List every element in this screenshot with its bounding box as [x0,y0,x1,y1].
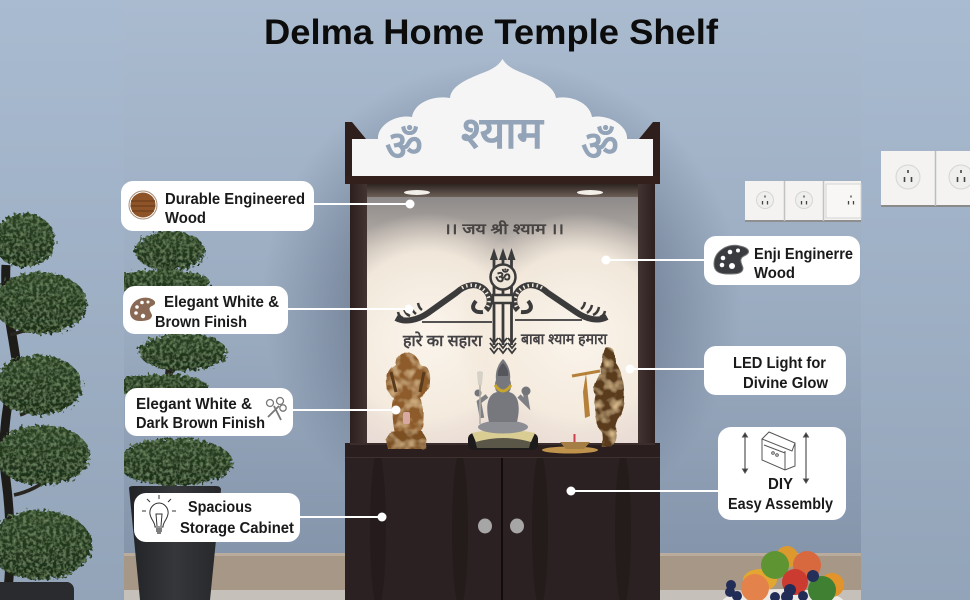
callout: enji engineered wood: Enjı Enginerre [754,246,853,263]
callout: DIY easy assembly: DIY [768,476,793,493]
ceiling [367,184,638,197]
LED light right [577,190,603,195]
callout: enji engineered wood [704,236,860,285]
icon: brown palette [130,298,155,321]
left column [350,184,367,446]
crown side posts [345,122,660,180]
callout: LED light for divine glow: Divine Glow [743,375,829,392]
callout: elegant white and dark brown finish: Dark Brown Finish [136,415,265,432]
statue plate and lamp [542,434,598,454]
leader lines and dots [288,200,718,522]
right emblem text: बाबा श्याम हमारा [520,331,608,348]
back panel with light glow [367,197,638,445]
crown om right: ॐ [581,123,619,169]
icon: wood disc [129,191,157,219]
callout: spacious storage cabinet: Spacious [188,499,252,516]
callout: elegant white and dark brown finish: Elegant White & [136,396,252,413]
bow and arrows emblem [396,248,607,353]
callout: elegant white and brown finish: Brown Finish [155,314,247,331]
left bonsai tree [0,213,92,590]
floor and skirting [124,553,861,600]
crown white arch panel [352,59,653,176]
door handle right [510,518,524,534]
crown om left: ॐ [385,123,423,169]
callout: durable engineered wood [121,181,314,231]
top wall text: ।। जय श्री श्याम ।। [444,220,564,238]
callout: spacious storage cabinet: Storage Cabinet [180,520,295,537]
icon: light bulb [142,495,176,533]
crown beam [345,176,660,184]
callout: durable engineered wood: Wood [165,210,206,227]
callout: elegant white and brown finish [123,286,288,334]
title: Delma Home Temple Shelf [264,13,718,52]
shelf top [345,443,660,458]
cabinet doors [345,452,660,600]
icon: scissors [266,398,286,420]
door handle left [478,518,492,534]
left emblem text: हारे का सहारा [402,331,483,350]
fruit bowl [722,546,844,600]
callout: DIY easy assembly [718,427,846,520]
crown text: shyam: श्याम [461,109,545,158]
wall sockets: right panel [881,151,970,207]
LED light left [404,190,430,195]
right column [638,184,655,446]
callout: LED light for divine glow: LED Light for [733,355,826,372]
callout: DIY easy assembly: Easy Assembly [728,496,833,513]
callout: LED light for divine glow [704,346,846,395]
wall sockets: middle strip [745,181,861,222]
left plant pot [0,582,74,600]
callout: elegant white and brown finish: Elegant White & [164,294,279,311]
statue: Ganesha [386,353,430,449]
om in emblem: ॐ [495,268,511,287]
centre plant pot [129,486,221,600]
statue: Krishna [572,347,624,447]
centre bonsai tree [124,231,234,486]
callout: enji engineered wood: Wood [754,265,795,282]
icon: dark palette [714,245,749,274]
callout: spacious storage cabinet [134,493,300,542]
temple shelf unit [345,59,660,600]
icon: cabinet with arrows [742,432,808,483]
callout: durable engineered wood: Durable Engineered [165,191,305,208]
statue: Shiva [468,359,538,450]
callout: elegant white and dark brown finish [125,388,293,436]
